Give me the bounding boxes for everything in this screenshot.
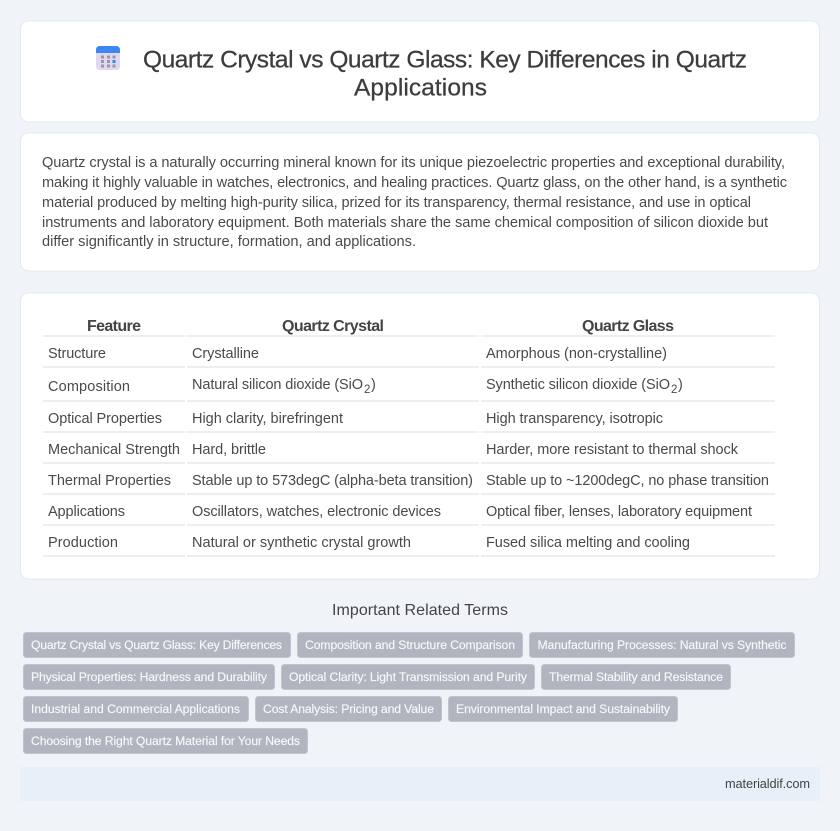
row: mechanical strength: Hard, brittle: [192, 442, 266, 458]
row: structure: [48, 346, 667, 362]
row: optical properties: High clarity, birefringent: [192, 411, 343, 427]
title: Applications: [354, 74, 487, 102]
row: applications: Applications: [48, 504, 125, 520]
row: structure: Crystalline: [192, 346, 259, 362]
row: composition: 2: [671, 384, 677, 396]
row: thermal properties: [48, 473, 769, 489]
row: composition: [48, 377, 683, 396]
related terms tags: [24, 632, 794, 754]
row: thermal properties: Thermal Properties: [48, 473, 171, 489]
row: mechanical strength: Mechanical Strength: [48, 442, 180, 458]
related terms tags: Optical Clarity: Light Transmission and Purity: [289, 670, 528, 684]
heading: related terms: Important Related Terms: [332, 602, 508, 619]
text block: description: Quartz crystal is a naturally occurring mineral known for its unique piezoelectric properties and exceptional durability,: [42, 155, 785, 171]
panel: comparison table: [20, 293, 820, 579]
footer: [20, 767, 820, 801]
related terms tags: Thermal Stability and Resistance: [549, 670, 723, 684]
panel: header: [20, 21, 820, 122]
row: production: Fused silica melting and cooling: [486, 535, 690, 551]
text block: description: instruments and laboratory equipment. Both materials share the same chemical composition of silicon dioxide but: [42, 215, 768, 231]
related terms tags: Cost Analysis: Pricing and Value: [263, 702, 434, 716]
panel: description: [20, 133, 820, 271]
related terms tags: Choosing the Right Quartz Material for Your Needs: [31, 734, 300, 748]
row: composition: 2: [364, 384, 370, 396]
row: composition: Natural silicon dioxide (SiO: [192, 377, 363, 393]
row: optical properties: High transparency, isotropic: [486, 411, 663, 427]
related terms tags: Environmental Impact and Sustainability: [456, 702, 671, 716]
table header: Quartz Crystal: [282, 318, 384, 335]
row: composition: Synthetic silicon dioxide (SiO: [486, 377, 670, 393]
text block: description: material produced by melting high-purity silica, prized for its transparency, thermal resistance, and use in optical: [42, 195, 751, 211]
row: composition: Composition: [48, 379, 130, 395]
row: mechanical strength: Harder, more resistant to thermal shock: [486, 442, 739, 458]
row: applications: Oscillators, watches, electronic devices: [192, 504, 441, 520]
row: structure: Structure: [48, 346, 106, 362]
title: Quartz Crystal vs Quartz Glass: Key Differences in Quartz: [143, 46, 747, 74]
row: applications: [48, 504, 752, 520]
related terms tags: Manufacturing Processes: Natural vs Synthetic: [538, 638, 786, 652]
related terms tags: Composition and Structure Comparison: [305, 638, 515, 652]
row: structure: Amorphous (non-crystalline): [486, 346, 667, 362]
row: production: [48, 535, 690, 551]
row: mechanical strength: [48, 442, 739, 458]
footer: materialdif.com: [725, 776, 810, 791]
row: thermal properties: Stable up to ~1200degC, no phase transition: [486, 473, 769, 489]
related terms tags: Physical Properties: Hardness and Durability: [31, 670, 268, 684]
row: production: Production: [48, 535, 118, 551]
table header: Feature: [87, 318, 141, 335]
table header: Quartz Glass: [582, 318, 674, 335]
row: production: Natural or synthetic crystal growth: [192, 535, 411, 551]
row: optical properties: Optical Properties: [48, 411, 162, 427]
icon: calendar grid: [96, 46, 120, 70]
row: composition: ): [371, 377, 376, 393]
text block: description: making it highly valuable in watches, electronics, and healing practices. Quartz glass, on the other hand, is a synthetic: [42, 175, 787, 191]
related terms tags: Quartz Crystal vs Quartz Glass: Key Differences: [31, 638, 282, 652]
related terms tags: Industrial and Commercial Applications: [31, 702, 240, 716]
row: thermal properties: Stable up to 573degC (alpha-beta transition): [192, 473, 473, 489]
table header: [87, 318, 674, 335]
row: applications: Optical fiber, lenses, laboratory equipment: [486, 504, 752, 520]
text block: description: [42, 155, 787, 250]
row: optical properties: [48, 411, 663, 427]
title: [143, 46, 747, 102]
row: composition: ): [678, 377, 683, 393]
text block: description: differ significantly in structure, formation, and applications.: [42, 234, 416, 250]
